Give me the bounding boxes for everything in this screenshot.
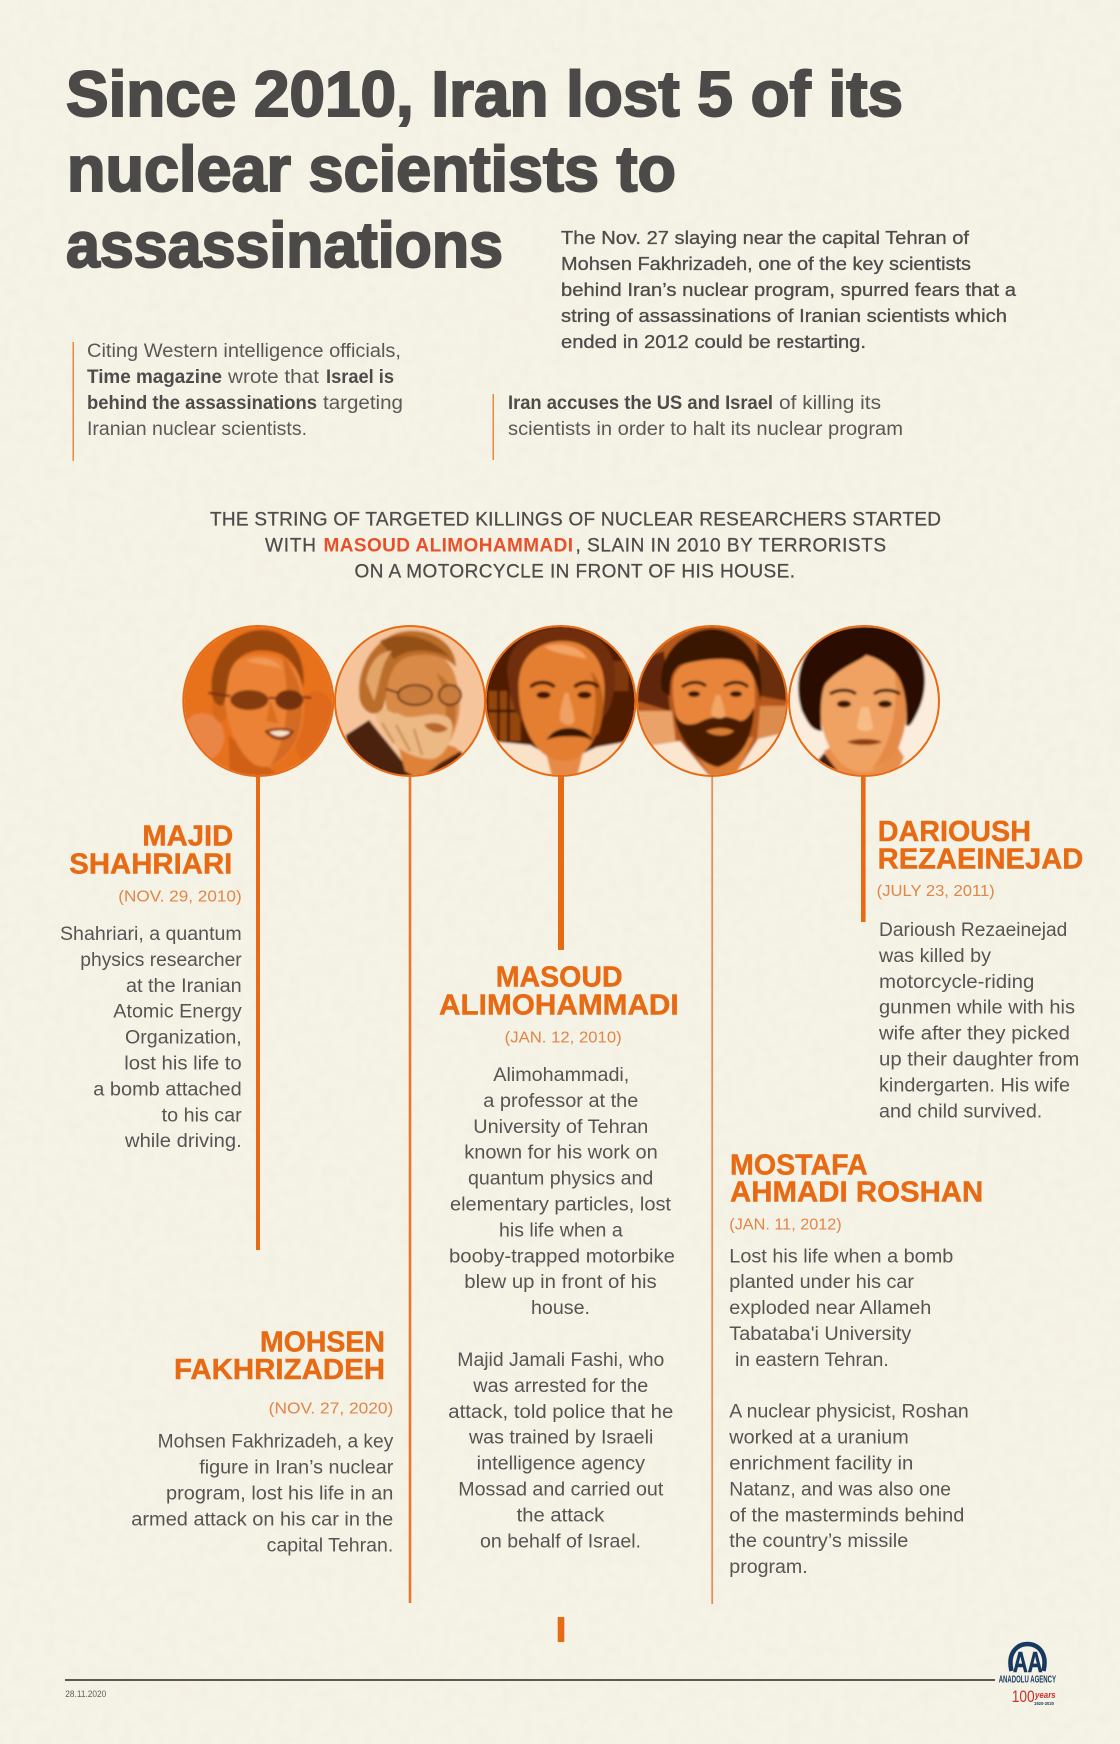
biography: figure in Iran’s nuclear — [199, 1458, 394, 1479]
callout: Time magazine: behind the assassinations — [87, 393, 317, 414]
portrait: Mostafa Ahmadi Roshan — [632, 621, 792, 781]
biography: wife after they picked — [878, 1024, 1070, 1045]
biography: worked at a uranium — [728, 1428, 909, 1449]
biography: at the Iranian — [126, 976, 242, 997]
date: (NOV. 29, 2010) — [118, 889, 242, 906]
section headline: MASOUD ALIMOHAMMADI — [324, 536, 573, 557]
name: MASOUD — [496, 962, 623, 994]
biography: a professor at the — [483, 1091, 638, 1112]
biography: the attack — [517, 1505, 605, 1526]
footer rule — [65, 1679, 995, 1681]
callout: Time magazine: targeting — [323, 393, 403, 414]
biography: booby-trapped motorbike — [449, 1246, 675, 1267]
name — [730, 1149, 983, 1209]
biography: while driving. — [124, 1131, 242, 1152]
title: assassinations — [66, 209, 503, 281]
biography: was trained by Israeli — [468, 1428, 653, 1449]
logo: Anadolu Agency: 1920-2020 — [1034, 1701, 1054, 1706]
biography: capital Tehran. — [267, 1535, 393, 1556]
intro paragraph: Mohsen Fakhrizadeh, one of the key scientists — [561, 253, 971, 274]
timeline line: Alimohammadi — [558, 770, 564, 950]
biography: lost his life to — [124, 1054, 242, 1074]
date: (NOV. 27, 2020) — [269, 1400, 393, 1417]
biography: a bomb attached — [93, 1079, 242, 1100]
biography: exploded near Allameh — [729, 1298, 931, 1319]
biography: known for his work on — [464, 1143, 658, 1164]
logo: Anadolu Agency — [999, 1644, 1056, 1706]
portrait: Majid Shahriari — [178, 621, 338, 781]
section headline: ON A MOTORCYCLE IN FRONT OF HIS HOUSE. — [354, 562, 795, 583]
callout: Time magazine: Iranian nuclear scientists. — [87, 419, 307, 440]
portrait: Masoud Alimohammadi — [485, 625, 636, 777]
name: MOSTAFA — [730, 1149, 868, 1181]
panel: Majid Shahriari — [60, 821, 242, 1152]
intro paragraph: The Nov. 27 slaying near the capital Tehran of — [561, 227, 970, 248]
biography: of the masterminds behind — [729, 1505, 964, 1526]
name — [69, 821, 233, 880]
biography: house. — [531, 1298, 590, 1319]
logo: Anadolu Agency: years — [1034, 1690, 1056, 1700]
biography: motorcycle-riding — [879, 972, 1034, 993]
section headline — [210, 510, 941, 583]
intro paragraph — [561, 227, 1017, 352]
name — [174, 1327, 385, 1386]
biography: attack, told police that he — [448, 1402, 673, 1423]
biography: to his car — [162, 1105, 242, 1126]
panel: Mohsen Fakhrizadeh — [131, 1327, 394, 1556]
biography — [878, 920, 1079, 1122]
biography: Organization, — [125, 1028, 242, 1049]
biography: Atomic Energy — [113, 1002, 242, 1023]
callout: Time magazine: Time magazine — [87, 367, 222, 388]
name — [439, 962, 679, 1021]
biography — [448, 1065, 675, 1552]
biography — [728, 1246, 969, 1578]
biography — [131, 1432, 394, 1556]
biography: was killed by — [878, 946, 992, 967]
callout: Time magazine — [72, 341, 403, 461]
biography: quantum physics and — [468, 1169, 653, 1190]
callout: Time magazine: Israel is — [326, 367, 394, 388]
biography: gunmen while with his — [879, 998, 1075, 1019]
biography: and child survived. — [879, 1101, 1042, 1122]
callout: Time magazine: Citing Western intelligence officials, — [87, 341, 401, 362]
panel: Mostafa Ahmadi Roshan — [728, 1149, 983, 1578]
section headline: WITH — [265, 536, 316, 557]
intro paragraph: ended in 2012 could be restarting. — [561, 331, 866, 352]
panel: Darioush Rezaeinejad — [877, 816, 1083, 1122]
portrait: Darioush Rezaeinejad — [784, 621, 944, 781]
biography: Tabataba'i University — [729, 1324, 912, 1345]
biography: Darioush Rezaeinejad — [879, 920, 1067, 941]
name: MOHSEN — [260, 1327, 385, 1359]
biography: elementary particles, lost — [450, 1194, 672, 1216]
intro paragraph: string of assassinations of Iranian scientists which — [561, 305, 1007, 326]
section headline: , SLAIN IN 2010 BY TERRORISTS — [576, 536, 886, 557]
biography: Mossad and carried out — [458, 1480, 664, 1500]
logo: Anadolu Agency: 100 — [1012, 1687, 1035, 1706]
title: Since 2010, Iran lost 5 of its — [66, 58, 903, 130]
biography: intelligence agency — [477, 1454, 646, 1475]
biography: program. — [729, 1557, 808, 1578]
portrait: Mohsen Fakhrizadeh — [334, 625, 486, 777]
biography: blew up in front of his — [464, 1272, 657, 1293]
name: MAJID — [142, 821, 233, 853]
callout: Iran accuses — [492, 393, 903, 460]
timeline stub — [558, 1617, 564, 1642]
biography: was arrested for the — [472, 1376, 648, 1397]
biography: armed attack on his car in the — [131, 1509, 393, 1530]
timeline line: Fakhrizadeh — [409, 770, 411, 1603]
name: ALIMOHAMMADI — [439, 989, 679, 1021]
date stamp: 28.11.2020 — [65, 1689, 106, 1700]
timeline line: Roshan — [711, 770, 713, 1604]
callout: Iran accuses: scientists in order to halt its nuclear program — [508, 419, 903, 440]
title: nuclear scientists to — [67, 133, 676, 205]
biography — [60, 924, 242, 1152]
biography: up their daughter from — [879, 1050, 1079, 1070]
intro paragraph: behind Iran’s nuclear program, spurred fears that a — [561, 279, 1017, 300]
title — [66, 58, 903, 281]
name — [878, 816, 1083, 875]
name: REZAEINEJAD — [878, 843, 1083, 875]
callout: Time magazine: wrote that — [227, 367, 320, 388]
biography: the country’s missile — [729, 1531, 908, 1552]
timeline line: Shahriari — [256, 770, 260, 1250]
section headline: THE STRING OF TARGETED KILLINGS OF NUCLEAR RESEARCHERS STARTED — [210, 510, 941, 531]
biography: program, lost his life in an — [166, 1484, 393, 1504]
biography: enrichment facility in — [729, 1454, 913, 1474]
biography: planted under his car — [729, 1272, 915, 1293]
timeline line: Rezaeinejad — [861, 770, 866, 922]
biography: Lost his life when a bomb — [729, 1246, 953, 1267]
date: (JAN. 12, 2010) — [505, 1030, 622, 1047]
biography: Majid Jamali Fashi, who — [457, 1350, 664, 1371]
name: DARIOUSH — [878, 816, 1031, 848]
biography: Alimohammadi, — [493, 1065, 629, 1086]
callout: Iran accuses: Iran accuses the US and Israel — [508, 393, 773, 414]
biography: Shahriari, a quantum — [60, 924, 242, 945]
biography: Mohsen Fakhrizadeh, a key — [158, 1432, 394, 1453]
biography: his life when a — [499, 1220, 623, 1241]
name: FAKHRIZADEH — [174, 1354, 385, 1386]
date: (JAN. 11, 2012) — [729, 1216, 842, 1233]
biography: kindergarten. His wife — [879, 1075, 1070, 1096]
callout: Iran accuses: of killing its — [779, 393, 881, 414]
name: AHMADI ROSHAN — [730, 1177, 983, 1209]
date: (JULY 23, 2011) — [877, 883, 995, 900]
panel: Masoud Alimohammadi — [439, 962, 679, 1552]
biography: in eastern Tehran. — [735, 1350, 889, 1371]
biography: A nuclear physicist, Roshan — [729, 1402, 969, 1423]
biography: physics researcher — [80, 950, 242, 971]
name: SHAHRIARI — [69, 848, 232, 880]
logo: Anadolu Agency: ANADOLU AGENCY — [999, 1674, 1056, 1686]
biography: Natanz, and was also one — [729, 1479, 951, 1500]
logo: Anadolu Agency: AA — [1013, 1647, 1043, 1679]
biography: on behalf of Israel. — [480, 1531, 641, 1552]
biography: University of Tehran — [473, 1117, 648, 1138]
